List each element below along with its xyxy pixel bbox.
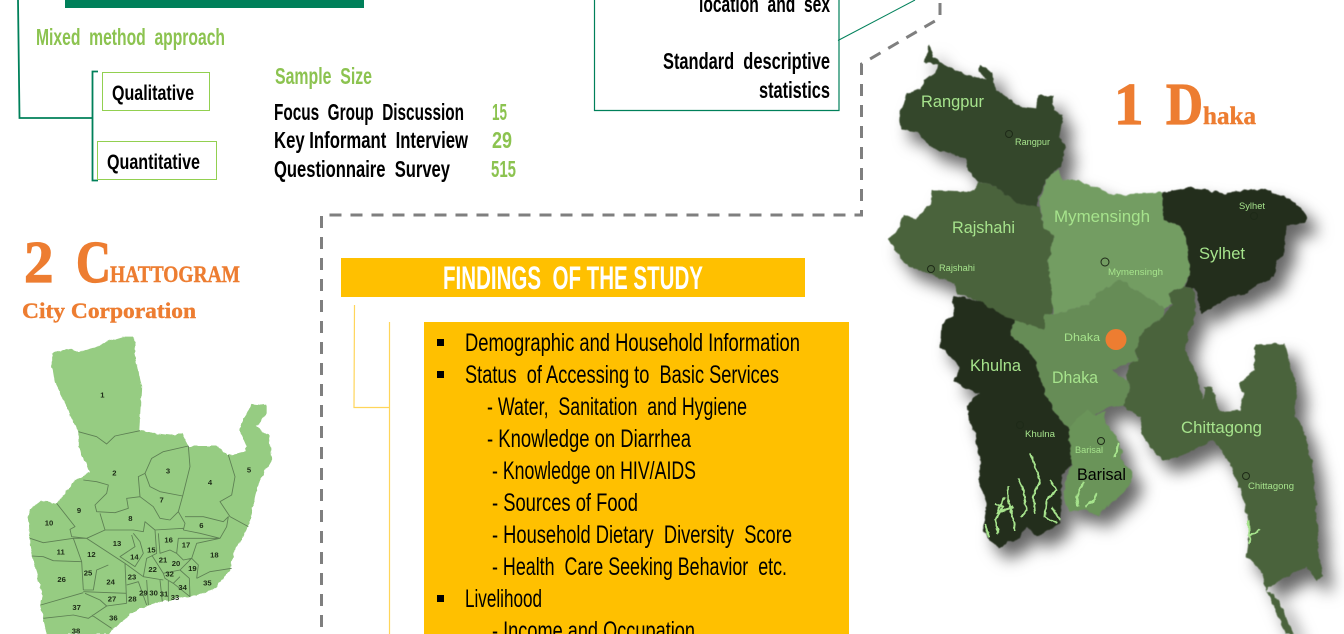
heading: mixed method approach: Mixed method approach xyxy=(36,24,225,50)
map: Bangladesh divisions xyxy=(888,44,1323,634)
city markers xyxy=(928,130,1258,480)
region: Rajshahi xyxy=(888,182,1054,330)
map: Chattogram city corporation wards: 37 xyxy=(72,603,81,612)
map: Chattogram city corporation wards: 7 xyxy=(160,496,164,505)
box: quantitative xyxy=(98,142,216,180)
value: 29: 29 xyxy=(492,127,512,153)
map: Chattogram city corporation wards: 5 xyxy=(247,465,252,474)
map: Chattogram city corporation wards: 11 xyxy=(57,548,65,557)
subheading: city corporation: City Corporation xyxy=(22,298,196,323)
findings list: - Knowledge on HIV/AIDS xyxy=(492,457,696,485)
location marker: Dhaka xyxy=(1106,329,1126,350)
city labels xyxy=(939,137,1294,491)
findings list xyxy=(424,322,849,634)
map: Chattogram city corporation wards: 36 xyxy=(109,614,118,623)
box: qualitative xyxy=(102,72,210,110)
map: Chattogram city corporation wards: 33 xyxy=(171,593,179,602)
map: Chattogram city corporation wards: 3 xyxy=(166,467,170,476)
map: Chattogram city corporation wards: 16 xyxy=(164,535,173,544)
map: Chattogram city corporation wards: 26 xyxy=(57,575,66,584)
region: Sylhet xyxy=(1162,188,1307,313)
division labels: Rangpur xyxy=(921,92,984,111)
heading: 2 Chattogram: C xyxy=(76,229,111,295)
division labels: Khulna xyxy=(970,356,1022,375)
map: Chattogram city corporation wards: 28 xyxy=(128,595,137,604)
map: Chattogram city corporation wards: 4 xyxy=(208,478,213,487)
map: Chattogram city corporation wards: 23 xyxy=(128,573,136,582)
map: Chattogram city corporation wards: 34 xyxy=(178,583,188,592)
heading: 2 Chattogram: HATTOGRAM xyxy=(110,262,240,287)
connector: methods bracket xyxy=(18,0,98,180)
findings list: Status of Accessing to Basic Services xyxy=(465,361,779,389)
map shapes xyxy=(888,44,1323,634)
heading: 1 Dhaka: haka xyxy=(1203,103,1256,130)
region: Chittagong xyxy=(1123,287,1323,634)
map: Chattogram city corporation wards: 27 xyxy=(108,595,116,604)
row: focus group discussion: Focus Group Discussion xyxy=(274,99,464,125)
connector line xyxy=(838,0,915,40)
heading: 1 Dhaka xyxy=(1114,71,1256,137)
findings header xyxy=(341,258,805,297)
findings list: - Health Care Seeking Behavior etc. xyxy=(492,553,787,581)
city labels: Sylhet xyxy=(1239,201,1266,211)
box: quantitative: Quantitative xyxy=(107,151,200,174)
division labels: Sylhet xyxy=(1199,244,1245,263)
map: Chattogram city corporation wards: 15 xyxy=(147,546,156,555)
header bar xyxy=(65,0,364,8)
map: Chattogram city corporation wards: 32 xyxy=(165,570,174,579)
panel: sample size xyxy=(274,63,516,182)
findings header: FINDINGS OF THE STUDY xyxy=(443,260,703,296)
box: qualitative: Qualitative xyxy=(112,82,194,105)
map: Chattogram city corporation wards: 30 xyxy=(149,588,158,597)
findings list: Demographic and Household Information xyxy=(465,329,800,357)
city labels: Rajshahi xyxy=(939,263,975,273)
city labels: Dhaka xyxy=(1064,332,1101,344)
map: Chattogram city corporation wards: 29 xyxy=(139,589,148,598)
value: 515: 515 xyxy=(491,156,516,182)
city labels: Rangpur xyxy=(1015,137,1050,147)
map: Chattogram city corporation wards: 31 xyxy=(160,590,169,599)
box outline xyxy=(594,0,839,110)
city labels: Barisal xyxy=(1075,445,1103,455)
city labels: Chittagong xyxy=(1248,481,1294,491)
map: Chattogram city corporation wards: 22 xyxy=(148,565,157,574)
division labels: Rajshahi xyxy=(952,218,1015,237)
rivers xyxy=(985,443,1260,543)
panel: analysis box xyxy=(594,0,915,110)
map: Chattogram city corporation wards: 25 xyxy=(84,568,93,577)
map: Chattogram city corporation wards: 24 xyxy=(106,577,116,586)
heading: 2 Chattogram xyxy=(24,229,240,295)
findings list: Livelihood xyxy=(465,585,542,613)
map: Chattogram city corporation wards: 12 xyxy=(87,550,96,559)
value: 15: 15 xyxy=(492,99,507,125)
division labels: Dhaka xyxy=(1052,368,1099,387)
map: Chattogram city corporation wards: 20 xyxy=(172,559,180,568)
city labels: Mymensingh xyxy=(1108,267,1163,277)
map: Chattogram city corporation wards: 18 xyxy=(210,550,219,559)
map: Chattogram city corporation wards: 9 xyxy=(77,506,81,515)
panel: findings of the study xyxy=(341,258,849,634)
findings list: - Knowledge on Diarrhea xyxy=(487,425,691,453)
map: Chattogram city corporation wards xyxy=(28,337,272,634)
heading: 1 Dhaka: D xyxy=(1166,71,1203,137)
map: Chattogram city corporation wards: 21 xyxy=(159,555,168,564)
heading: 2 Chattogram: 2 xyxy=(24,229,54,295)
division labels: Mymensingh xyxy=(1054,207,1150,226)
map: Chattogram city corporation wards: 19 xyxy=(188,564,197,573)
map: Chattogram city corporation wards: 14 xyxy=(130,552,139,561)
map: Chattogram city corporation wards: 2 xyxy=(112,468,116,477)
row: questionnaire survey: Questionnaire Survey xyxy=(274,156,450,182)
map: Chattogram city corporation wards: 13 xyxy=(113,539,121,548)
division labels: Chittagong xyxy=(1181,418,1262,437)
map: Chattogram city corporation wards: 8 xyxy=(128,514,133,523)
map: Chattogram city corporation wards: 1 xyxy=(100,391,105,400)
map: Chattogram city corporation wards: 35 xyxy=(203,578,212,587)
heading: sample size: Sample Size xyxy=(275,63,372,89)
heading: 1 Dhaka: 1 xyxy=(1114,71,1144,137)
city labels: Khulna xyxy=(1025,429,1055,439)
text: standard descriptive: Standard descriptive xyxy=(663,48,830,74)
dashed route connector xyxy=(322,3,940,634)
text: statistics: statistics xyxy=(759,77,830,103)
findings list: - Household Dietary Diversity Score xyxy=(492,521,792,549)
region: Barisal xyxy=(1063,408,1132,517)
map: Chattogram city corporation wards: 6 xyxy=(199,521,203,530)
region: Rangpur xyxy=(898,44,1065,207)
row: key informant interview: Key Informant Interview xyxy=(274,127,468,153)
map: Chattogram city corporation wards: 10 xyxy=(45,519,53,528)
region: Dhaka xyxy=(1010,280,1165,428)
findings list: - Sources of Food xyxy=(492,489,638,517)
map: Chattogram city corporation wards: 17 xyxy=(182,540,190,549)
division labels xyxy=(921,92,1262,484)
region: Mymensingh xyxy=(1040,170,1190,315)
findings list: - Water, Sanitation and Hygiene xyxy=(487,393,747,421)
division labels: Barisal xyxy=(1077,465,1126,484)
region: Khulna xyxy=(940,295,1072,548)
connector bracket xyxy=(354,305,390,634)
panel: methodology xyxy=(18,0,364,180)
